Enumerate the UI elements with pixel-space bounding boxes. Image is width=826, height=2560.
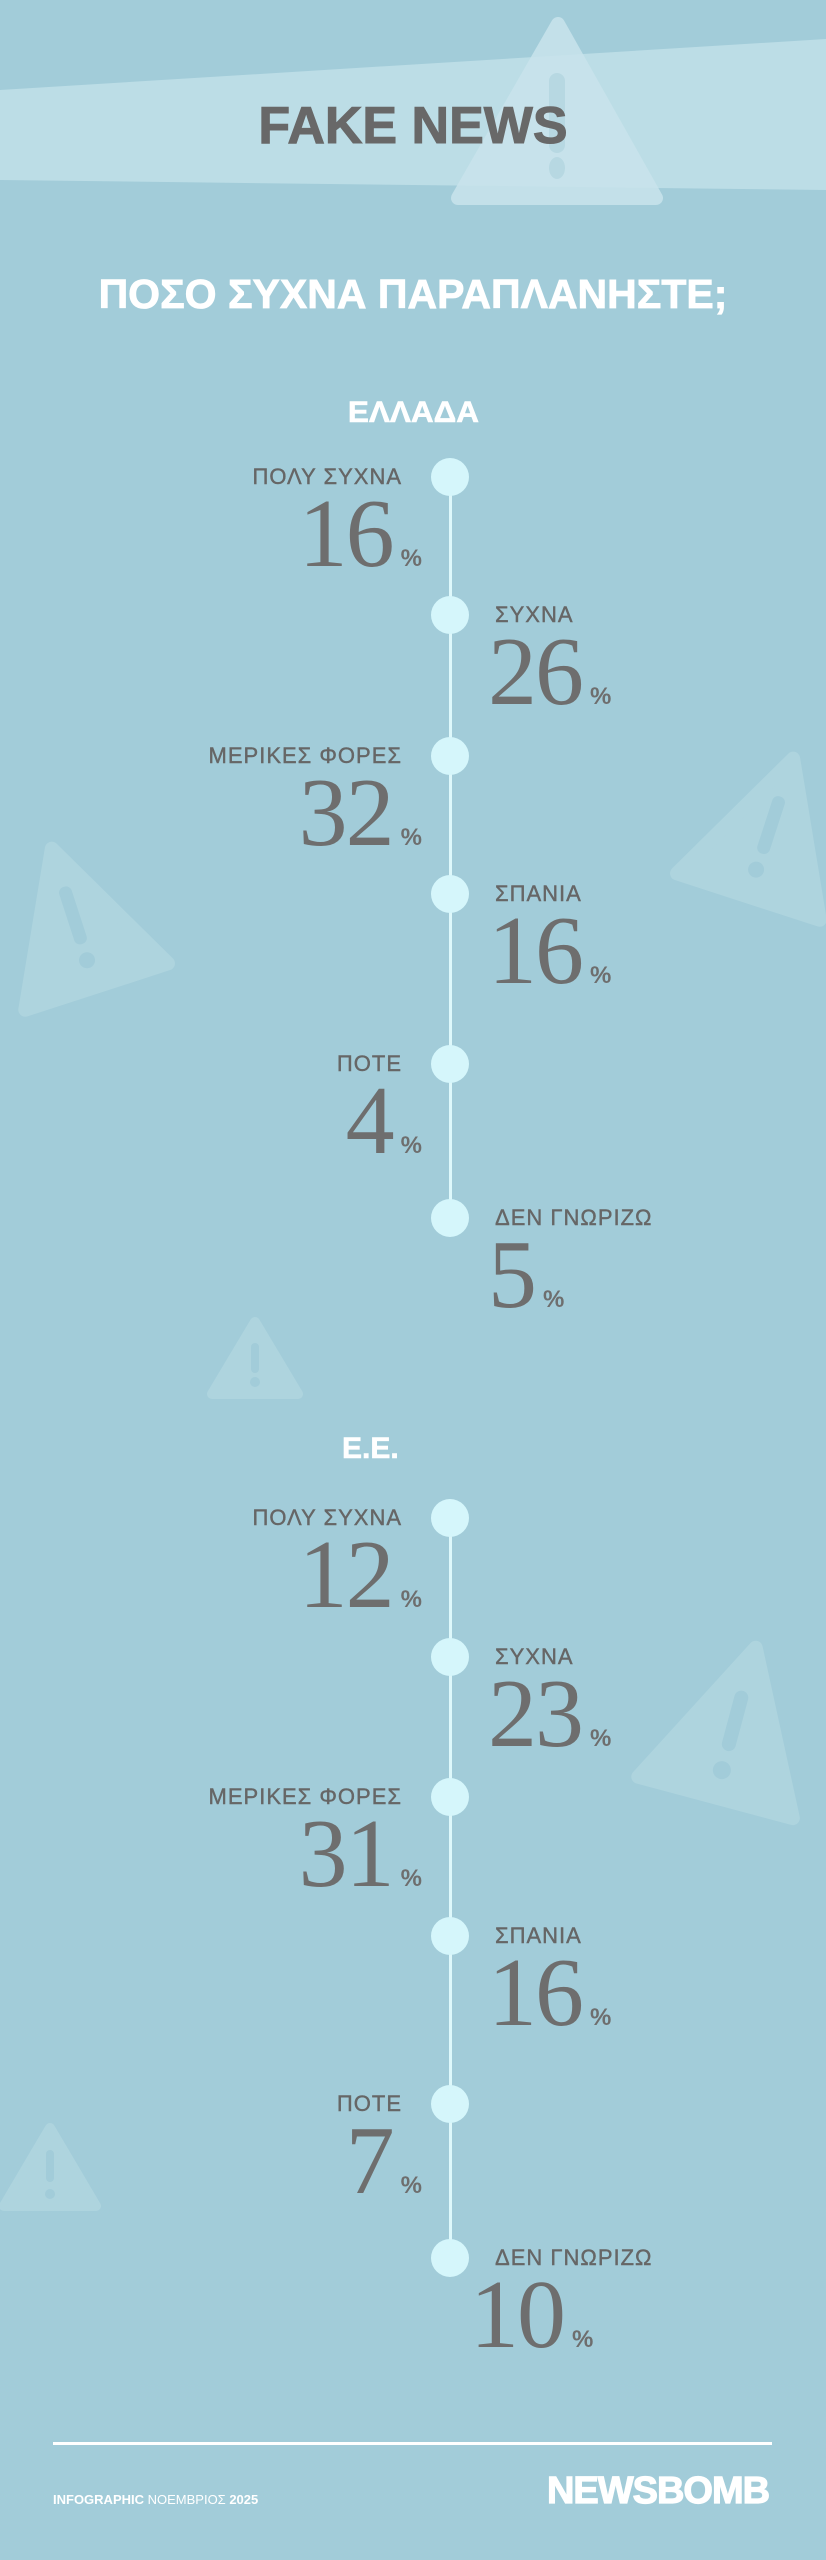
- item: ΜΕΡΙΚΕΣ ΦΟΡΕΣ 31%: ΜΕΡΙΚΕΣ ΦΟΡΕΣ: [209, 1784, 402, 1809]
- icon: header warning triangle: [458, 24, 656, 198]
- item: ΜΕΡΙΚΕΣ ΦΟΡΕΣ 31%: 31 %: [299, 1800, 422, 1908]
- item: ΣΥΧΝΑ 26%: ΣΥΧΝΑ: [495, 602, 574, 627]
- item: ΣΥΧΝΑ 26%: 26 %: [488, 618, 611, 726]
- section heading: Ελλάδα: ΕΛΛΑΔΑ: [347, 396, 479, 429]
- item: ΔΕΝ ΓΝΩΡΙΖΩ 10%: [470, 2245, 652, 2369]
- timeline: Ε.Ε.: [209, 1499, 652, 2369]
- icon: small warning triangle: [212, 1322, 298, 1394]
- item: ΠΟΤΕ 7%: 7 %: [346, 2107, 422, 2215]
- item: ΔΕΝ ΓΝΩΡΙΖΩ 5%: ΔΕΝ ΓΝΩΡΙΖΩ: [495, 1205, 652, 1230]
- logo: NEWSBOMB: NEWSBOMB: [547, 2470, 769, 2512]
- icon: right warning triangle: [677, 735, 826, 920]
- item: ΠΟΛΥ ΣΥΧΝΑ 16%: ΠΟΛΥ ΣΥΧΝΑ: [252, 464, 402, 489]
- item: ΜΕΡΙΚΕΣ ΦΟΡΕΣ 31%: [209, 1784, 422, 1908]
- item: ΣΠΑΝΙΑ 16%: ΣΠΑΝΙΑ: [495, 881, 582, 906]
- item: ΠΟΤΕ 7%: ΠΟΤΕ: [337, 2091, 402, 2116]
- footer credit: INFOGRAPHIC ΝΟΕΜΒΡΙΟΣ 2025: [53, 2492, 258, 2507]
- section heading: Ε.Ε.: Ε.Ε.: [342, 1432, 399, 1465]
- title: FAKE NEWS: [258, 97, 568, 155]
- header band: [0, 39, 826, 190]
- item: ΣΠΑΝΙΑ 16%: 16 %: [488, 897, 611, 1005]
- item: ΠΟΛΥ ΣΥΧΝΑ 12%: [252, 1505, 422, 1629]
- item: ΠΟΛΥ ΣΥΧΝΑ 12%: ΠΟΛΥ ΣΥΧΝΑ: [252, 1505, 402, 1530]
- item: ΔΕΝ ΓΝΩΡΙΖΩ 10%: 10 %: [470, 2261, 593, 2369]
- item: ΜΕΡΙΚΕΣ ΦΟΡΕΣ 32%: ΜΕΡΙΚΕΣ ΦΟΡΕΣ: [209, 743, 402, 768]
- item: ΣΥΧΝΑ 23%: ΣΥΧΝΑ: [495, 1644, 574, 1669]
- item: ΠΟΛΥ ΣΥΧΝΑ 12%: 12 %: [299, 1521, 422, 1629]
- item: ΣΠΑΝΙΑ 16%: ΣΠΑΝΙΑ: [495, 1923, 582, 1948]
- item: ΔΕΝ ΓΝΩΡΙΖΩ 10%: ΔΕΝ ΓΝΩΡΙΖΩ: [495, 2245, 652, 2270]
- item: ΠΟΛΥ ΣΥΧΝΑ 16%: [252, 464, 422, 588]
- icon: EU right warning triangle: [638, 1627, 826, 1818]
- item: ΣΥΧΝΑ 23%: 23 %: [488, 1660, 611, 1768]
- subtitle: ΠΟΣΟ ΣΥΧΝΑ ΠΑΡΑΠΛΑΝΗΣΤΕ;: [99, 271, 727, 317]
- timeline: Ελλάδα: [209, 458, 652, 1329]
- item: ΠΟΛΥ ΣΥΧΝΑ 16%: 16 %: [299, 480, 422, 588]
- icon: EU left warning triangle: [4, 2128, 96, 2206]
- icon: left warning triangle: [0, 825, 168, 1010]
- item: ΜΕΡΙΚΕΣ ΦΟΡΕΣ 32%: [209, 743, 422, 867]
- item: ΔΕΝ ΓΝΩΡΙΖΩ 5%: 5 %: [488, 1221, 564, 1329]
- item: ΔΕΝ ΓΝΩΡΙΖΩ 5%: [488, 1205, 652, 1329]
- item: ΜΕΡΙΚΕΣ ΦΟΡΕΣ 32%: 32 %: [299, 759, 422, 867]
- item: ΠΟΤΕ 4%: 4 %: [346, 1067, 422, 1175]
- item: ΠΟΤΕ 4%: ΠΟΤΕ: [337, 1051, 402, 1076]
- item: ΣΠΑΝΙΑ 16%: 16 %: [488, 1939, 611, 2047]
